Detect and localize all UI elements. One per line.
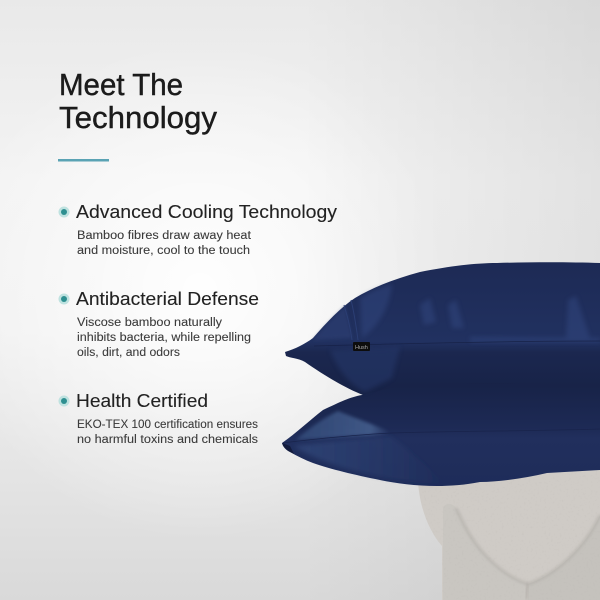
sheen: bottom pillow lower — [294, 436, 445, 484]
feature: advanced cooling: Bamboo fibres draw away heat — [77, 230, 252, 242]
feature: antibacterial — [58, 289, 259, 359]
pillow tag: Hush — [355, 345, 368, 351]
accent line — [58, 159, 109, 162]
top pillow — [285, 262, 600, 395]
feature: health certified — [58, 391, 258, 446]
feature: advanced cooling — [58, 202, 337, 257]
sheen: top pillow folds — [360, 284, 600, 342]
feature: health certified: no harmful toxins and chemicals — [77, 434, 258, 446]
pillow tag — [353, 342, 370, 351]
feature: advanced cooling: and moisture, cool to the touch — [77, 245, 250, 257]
sheen: top pillow lower left — [330, 347, 400, 392]
sheen: top pillow left corner — [313, 306, 352, 340]
title: Technology — [59, 100, 217, 135]
title — [59, 67, 217, 135]
feature: antibacterial: Viscose bamboo naturally — [77, 317, 222, 329]
sheen: bottom pillow upper — [296, 411, 390, 440]
feature: health certified: Health Certified — [76, 391, 208, 411]
stone stool — [418, 470, 600, 600]
bottom pillow — [282, 380, 600, 486]
feature: advanced cooling: Advanced Cooling Technology — [76, 202, 337, 222]
title: Meet The — [59, 67, 183, 102]
feature: health certified: EKO-TEX 100 certification ensures — [77, 419, 258, 431]
feature: antibacterial: inhibits bacteria, while repelling — [77, 332, 251, 344]
feature: antibacterial: oils, dirt, and odors — [77, 347, 180, 359]
feature: antibacterial: Antibacterial Defense — [76, 289, 259, 309]
